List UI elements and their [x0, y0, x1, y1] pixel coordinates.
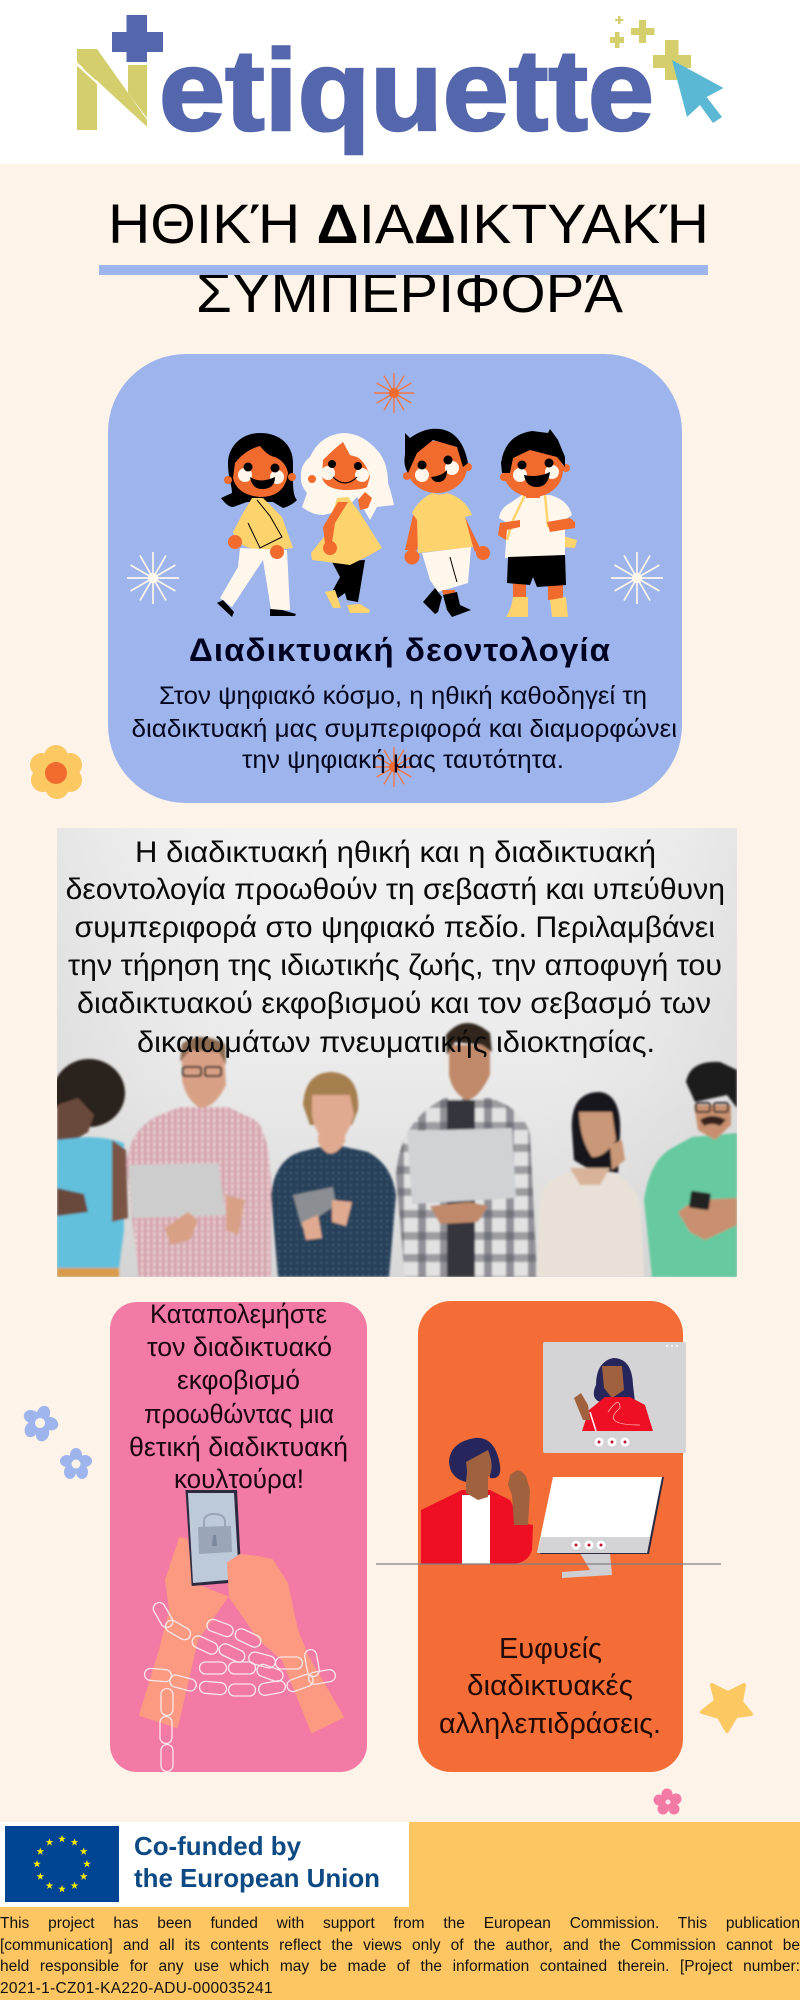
- logo text: Co-funded by: [134, 1831, 302, 1861]
- orange card text: διαδικτυακές: [467, 1670, 633, 1702]
- disclaimer text: held responsible for any use which may be made of the information contained therein. [Project number:: [0, 1958, 800, 1975]
- disclaimer text: 2021-1-CZ01-KA220-ADU-000035241: [0, 1980, 273, 1997]
- icon: orange flower: [30, 745, 82, 799]
- photo text: διαδικτυακού εκφοβισμού και τον σεβασμό των: [77, 987, 711, 1020]
- orange card text: Ευφυείς: [499, 1633, 602, 1665]
- logo blue plus: [112, 15, 163, 62]
- title underline bar: [99, 265, 708, 275]
- logo text: the European Union: [134, 1863, 380, 1893]
- orange card text: [439, 1633, 661, 1740]
- panel: digital ethics: [108, 354, 682, 803]
- pink card text: κουλτούρα!: [174, 1464, 304, 1494]
- logo word etiquette: etiquette: [159, 27, 654, 155]
- panel body text: Στον ψηφιακό κόσμο, η ηθική καθοδηγεί τη: [159, 682, 647, 710]
- logo: Netiquette: [76, 15, 724, 155]
- person 4: [396, 1023, 537, 1277]
- pink card text: θετική διαδικτυακή: [129, 1432, 348, 1462]
- desk line: [376, 1563, 721, 1565]
- phone with lock: [186, 1490, 242, 1586]
- logo yellow plus signs: [610, 16, 691, 80]
- icon: white spark left: [127, 552, 179, 604]
- panel heading: Διαδικτυακή δεοντολογία: [189, 632, 611, 668]
- photo: six people with devices: [53, 1023, 737, 1277]
- title: [99, 192, 709, 324]
- title line 1: ΗΘΙΚΉ ΔΙΑΔΙΚΤΥΑΚΉ: [108, 192, 709, 255]
- photo text: δικαιωμάτων πνευματικής ιδιοκτησίας.: [137, 1026, 655, 1059]
- icon: orange spark top: [374, 373, 414, 413]
- right arm and hand: [228, 1555, 343, 1732]
- person 2: [126, 1037, 271, 1277]
- panel body text: την ψηφιακή μας ταυτότητα.: [242, 746, 564, 774]
- EU flag: [5, 1826, 119, 1902]
- person 3: [271, 1072, 396, 1277]
- illustration: four children: [217, 429, 577, 617]
- disclaimer text: This project has been funded with support from the European Commission. This publication: [0, 1915, 800, 1932]
- pink card text: προωθώντας μια: [144, 1399, 334, 1429]
- woman at desk: [421, 1438, 533, 1564]
- panel body text: διαδικτυακή μας συμπεριφορά και διαμορφώνει: [132, 715, 677, 743]
- icon: white spark right: [611, 552, 663, 604]
- pink card text: τον διαδικτυακό: [147, 1332, 332, 1362]
- icon: pink flower: [654, 1788, 682, 1814]
- logo text: [134, 1831, 380, 1893]
- left arm and hand: [140, 1538, 227, 1727]
- icon: blue flower large: [17, 1400, 63, 1445]
- panel: pink card: [110, 1299, 367, 1772]
- pink card text: [129, 1299, 348, 1494]
- orange card background: [418, 1301, 683, 1772]
- child 3: [403, 429, 490, 617]
- photo text: Η διαδικτυακή ηθική και η διαδικτυακή: [135, 836, 656, 869]
- logo cursor arrow: [672, 60, 724, 123]
- person 1: [53, 1059, 128, 1277]
- logo white plate: [0, 1822, 409, 1907]
- person 6: [644, 1062, 737, 1277]
- panel body text: [132, 682, 677, 774]
- photo text: [66, 836, 725, 1059]
- illustration: chained hands holding phone: [140, 1490, 343, 1772]
- EU co-funded logo: [0, 1822, 409, 1907]
- photo background wall: [57, 828, 737, 1277]
- photo text: δεοντολογία προωθούν τη σεβαστή και υπεύθυνη: [66, 873, 725, 906]
- title line 2: ΣΥΜΠΕΡΙΦΟΡΆ: [196, 261, 624, 324]
- video call screen: [543, 1342, 686, 1453]
- orange card text: αλληλεπιδράσεις.: [439, 1708, 661, 1740]
- pink card text: εκφοβισμό: [177, 1365, 300, 1395]
- child 2: [301, 433, 394, 613]
- pink card background: [110, 1302, 367, 1772]
- icon: blue flower small: [60, 1448, 92, 1479]
- photo text: την τήρηση της ιδιωτικής ζωής, την αποφυγή του: [68, 949, 722, 982]
- pink card text: Καταπολεμήστε: [150, 1299, 327, 1329]
- icon: yellow star: [702, 1685, 751, 1731]
- logo letter N: N: [77, 30, 147, 154]
- chains: [144, 1600, 336, 1772]
- person 5: [537, 1092, 644, 1277]
- icon: orange spark bottom: [374, 747, 414, 787]
- child 4: [498, 429, 577, 617]
- photo text: συμπεριφορά στο ψηφιακό πεδίο. Περιλαμβάνει: [74, 911, 715, 944]
- child 1: [217, 433, 297, 617]
- panel: photo with text: [53, 828, 737, 1277]
- desktop monitor: [537, 1477, 664, 1578]
- panel background: [108, 354, 682, 803]
- disclaimer text: [communication] and all its contents reflect the views only of the author, and the Commission cannot be: [0, 1937, 800, 1954]
- footer band: [0, 1822, 800, 2000]
- disclaimer text: [0, 1915, 800, 1997]
- header band: [0, 0, 800, 164]
- panel: orange card: [376, 1301, 721, 1772]
